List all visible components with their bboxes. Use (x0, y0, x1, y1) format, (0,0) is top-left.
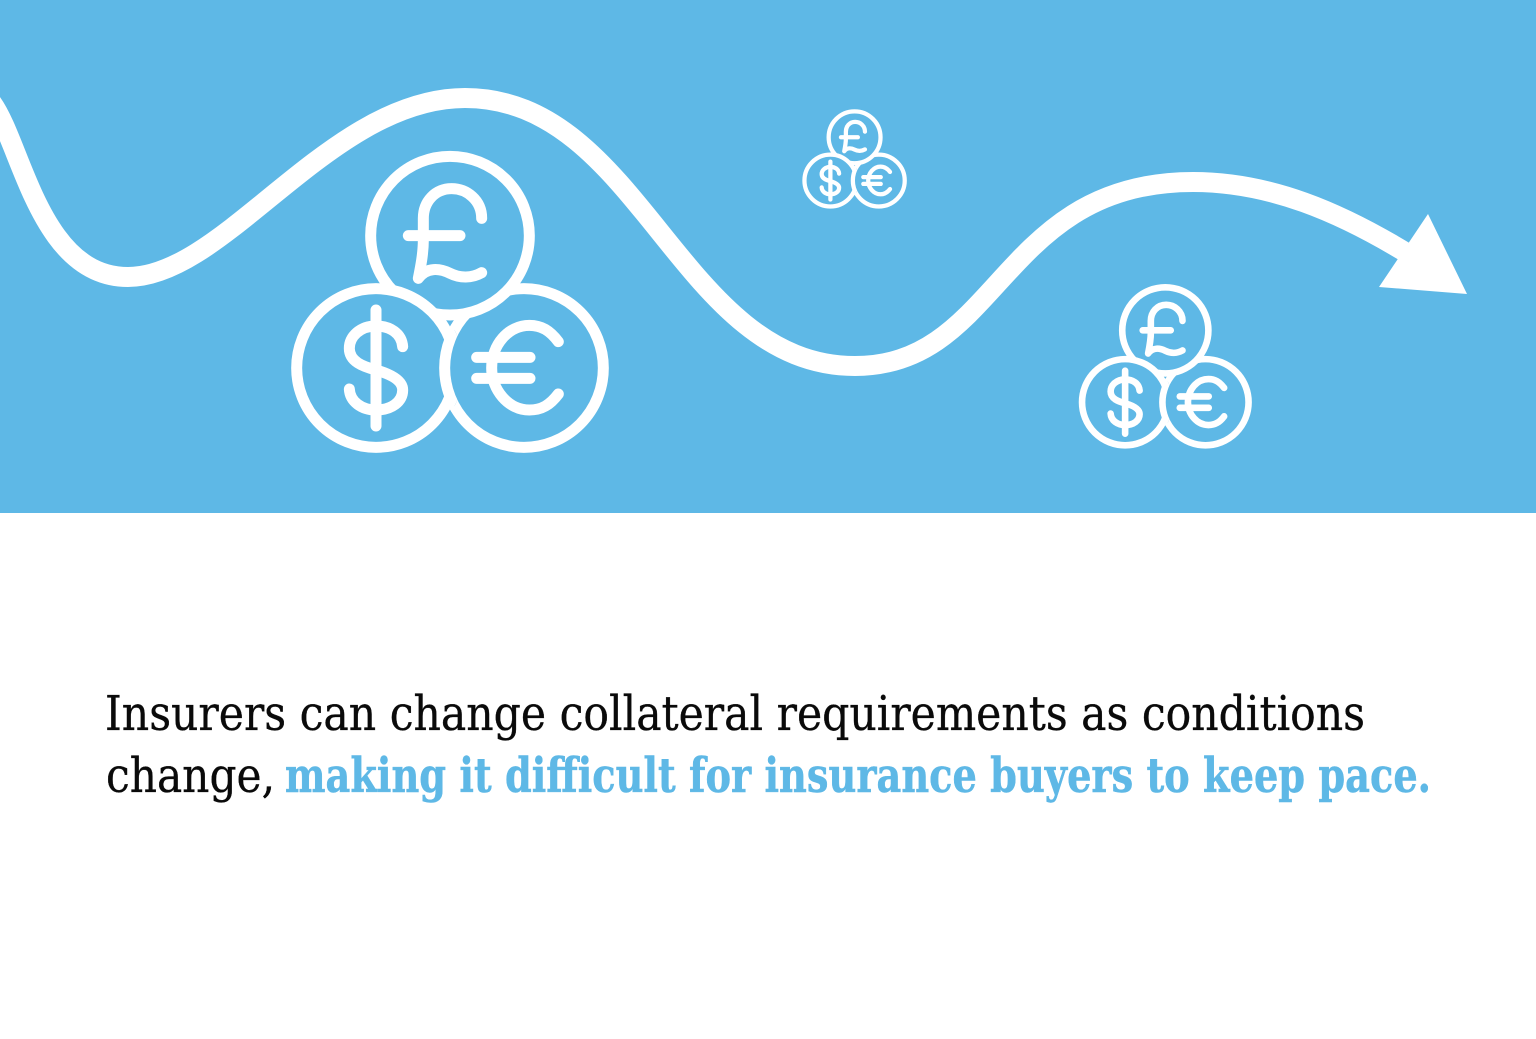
text: second line start: change, (106, 748, 275, 804)
text block: main statement (105, 686, 1431, 804)
panel: blue banner (0, 0, 1536, 513)
arrow: wavy downward trend line (0, 98, 1467, 366)
icon: large pound, dollar and euro coins (297, 156, 603, 447)
text: first line: Insurers can change collateral requirements as conditions (105, 686, 1365, 742)
icon: medium pound, dollar and euro coins (1082, 287, 1249, 445)
icon: small pound, dollar and euro coins (804, 111, 905, 206)
infographic (0, 0, 1536, 803)
